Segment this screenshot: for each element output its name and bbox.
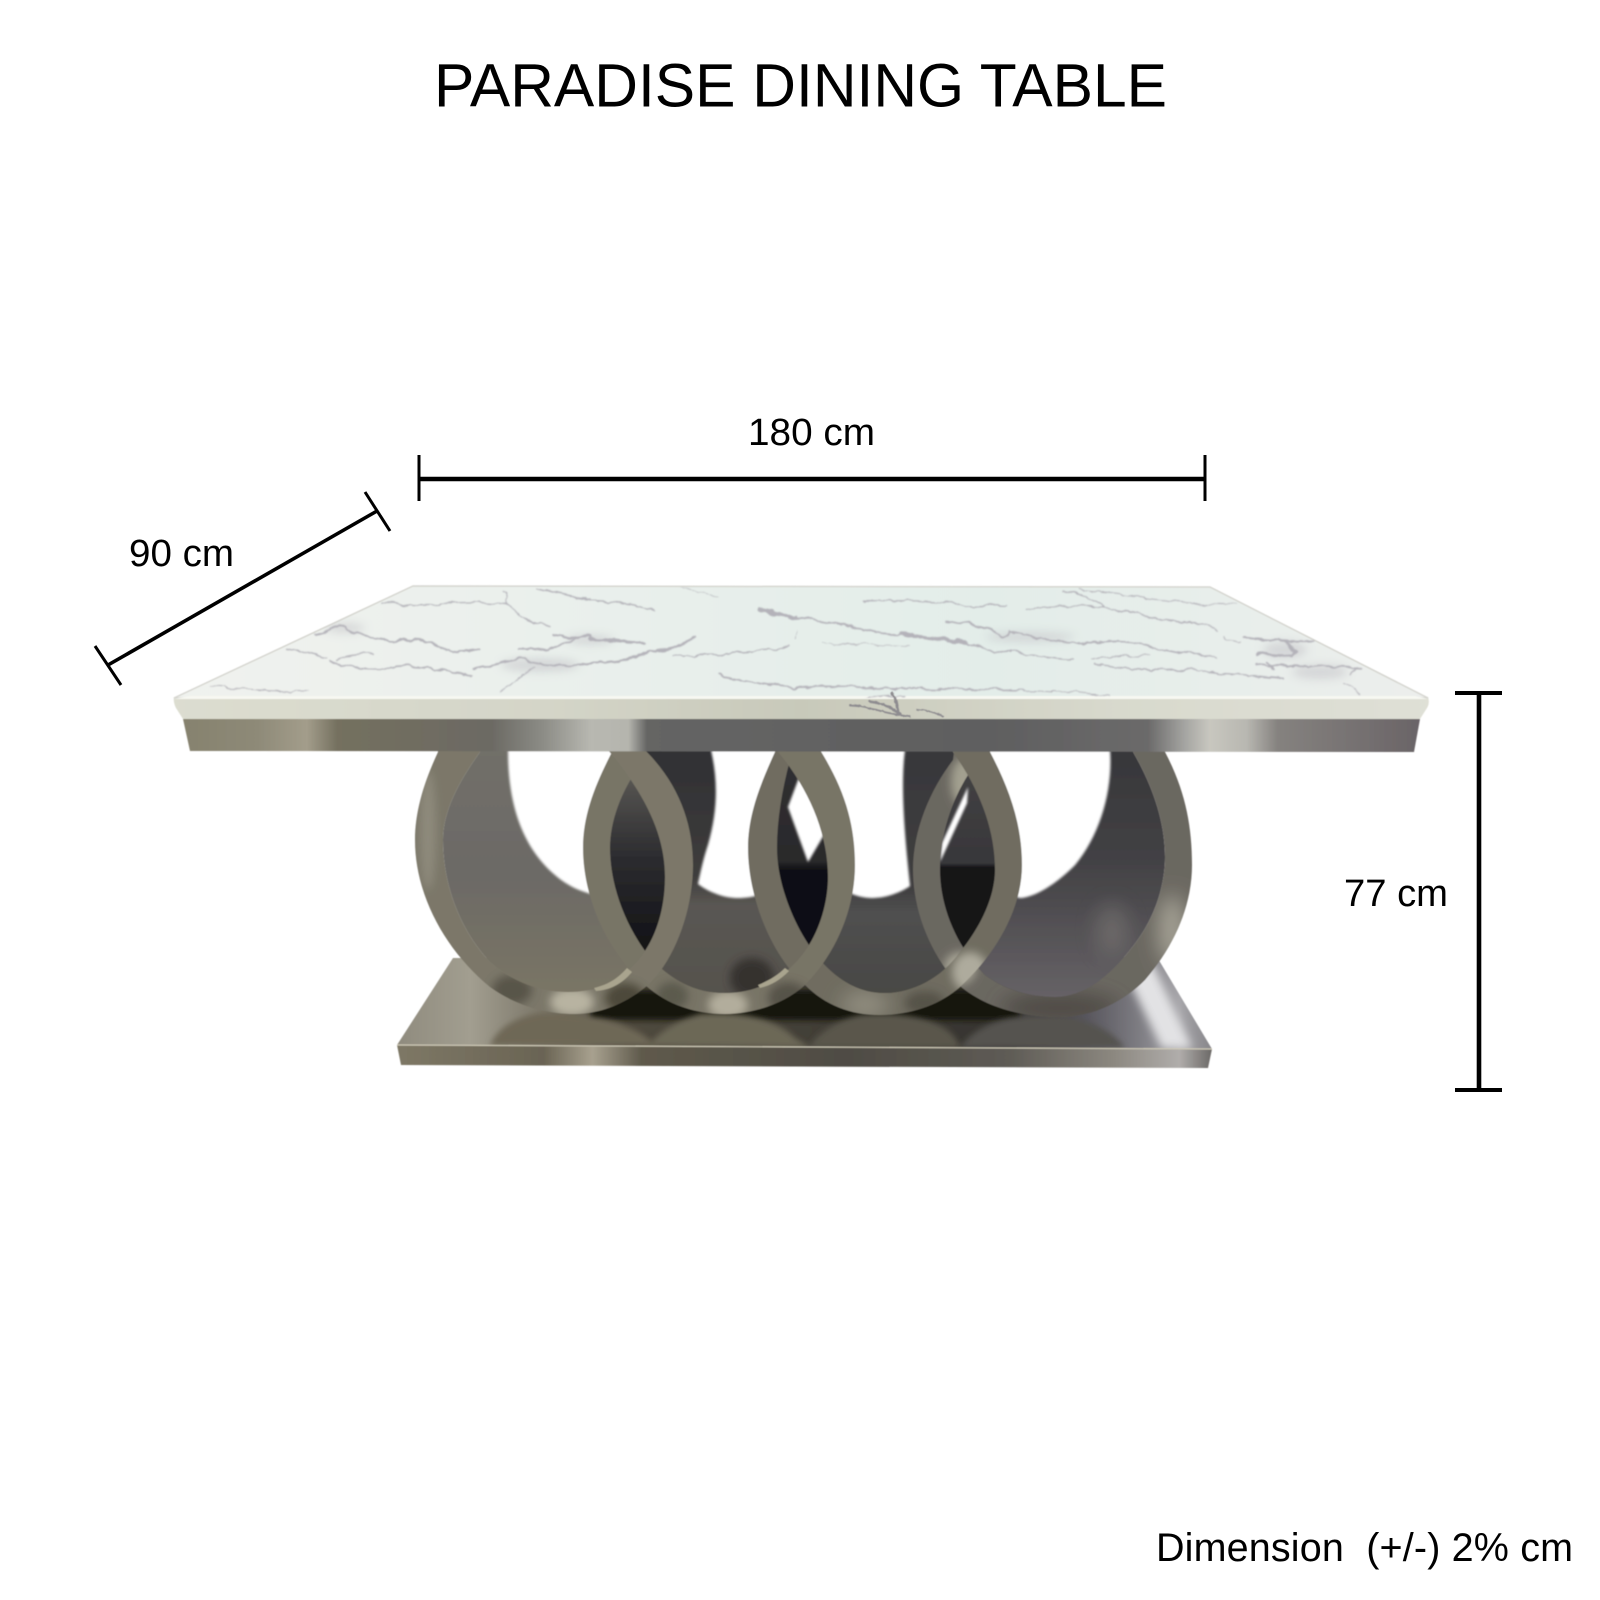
white openings between rings bbox=[508, 750, 1110, 898]
ring 3 bbox=[747, 750, 1023, 1016]
depth label: 90 cm: 90 cm bbox=[129, 533, 234, 575]
width label: 180 cm: 180 cm bbox=[748, 412, 875, 454]
table illustration bbox=[174, 586, 1429, 1068]
bevel highlight bbox=[174, 696, 1428, 699]
marble vein on front edge bbox=[850, 693, 943, 717]
ring 2 bbox=[582, 750, 856, 1015]
steel apron bbox=[183, 719, 1420, 752]
marble table top bbox=[174, 586, 1428, 698]
ring 1 bbox=[415, 700, 693, 1016]
tolerance note: Dimension (+/-) 2% cm bbox=[1156, 1526, 1573, 1570]
depth dimension arrow bbox=[95, 492, 390, 685]
pedestal back surfaces bbox=[442, 750, 1166, 998]
width dimension arrow bbox=[419, 455, 1205, 501]
marble slab front edge bbox=[174, 697, 1429, 719]
base plate ring reflections bbox=[490, 962, 1192, 1048]
height dimension arrow bbox=[1455, 693, 1502, 1090]
marble veins bbox=[210, 588, 1360, 698]
title: PARADISE DINING TABLE bbox=[434, 52, 1167, 120]
height label: 77 cm: 77 cm bbox=[1344, 873, 1448, 915]
base plate bbox=[397, 957, 1212, 1068]
ring 4 bbox=[912, 751, 1193, 1016]
